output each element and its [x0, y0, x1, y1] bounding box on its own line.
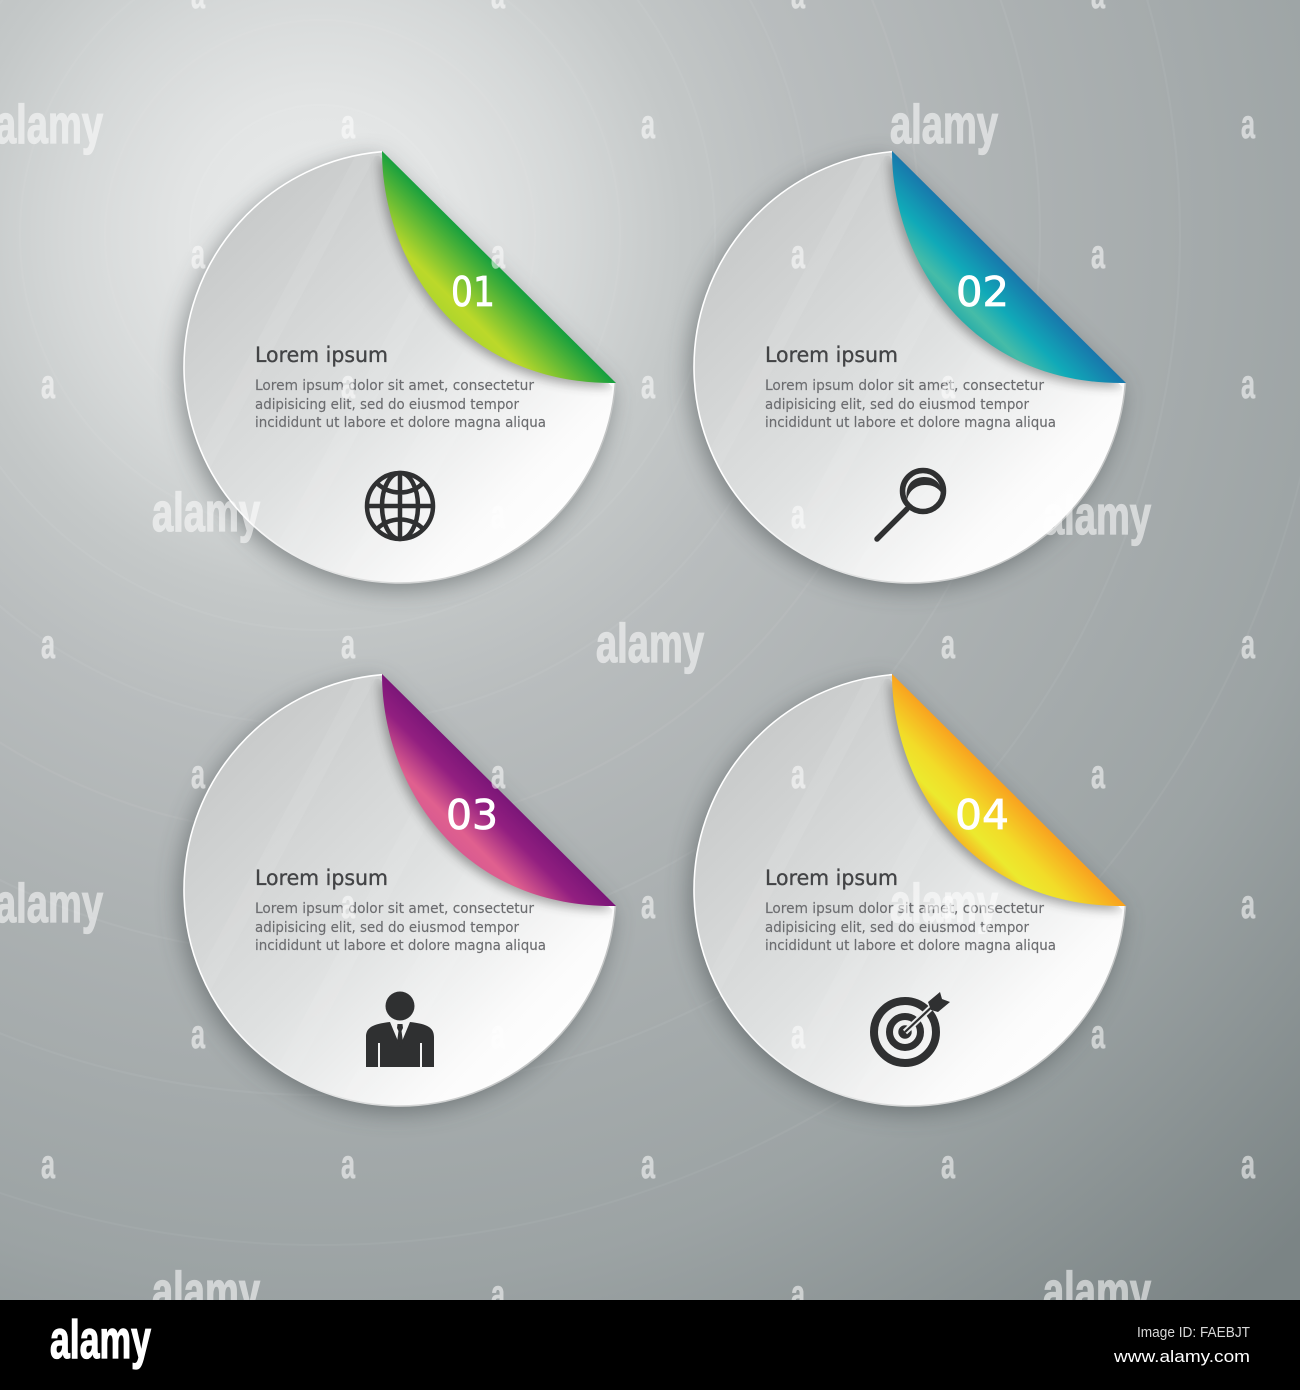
- watermarks: a: [1241, 101, 1256, 147]
- heading: Lorem ipsum: [765, 866, 898, 890]
- footer bar: [0, 1300, 1300, 1390]
- icon: magnifier: [877, 470, 944, 539]
- watermarks: a: [341, 101, 356, 147]
- watermarks: a: [791, 491, 806, 537]
- watermarks: a: [341, 881, 356, 927]
- heading: Lorem ipsum: [255, 343, 388, 367]
- watermarks: a: [941, 621, 956, 667]
- watermarks: a: [641, 1141, 656, 1187]
- watermarks: alamy: [1043, 484, 1151, 546]
- watermarks: a: [791, 1271, 806, 1317]
- watermarks: a: [41, 361, 56, 407]
- watermarks: a: [191, 751, 206, 797]
- watermarks: a: [1241, 1141, 1256, 1187]
- watermarks: a: [941, 881, 956, 927]
- icon: businessman: [366, 992, 434, 1067]
- text block: [255, 901, 546, 954]
- panel: step 01: [180, 147, 616, 597]
- watermarks: a: [341, 621, 356, 667]
- text block: [255, 378, 546, 431]
- panel: step 04: [690, 670, 1126, 1120]
- watermarks: a: [491, 751, 506, 797]
- icon: target with arrow: [874, 992, 950, 1063]
- watermarks: alamy: [152, 1260, 260, 1322]
- text block: adipisicing elit, sed do eiusmod tempor: [765, 397, 1029, 413]
- watermarks: a: [341, 1141, 356, 1187]
- text block: [765, 901, 1056, 954]
- watermarks: alamy: [596, 612, 704, 674]
- watermarks: a: [1241, 881, 1256, 927]
- text block: incididunt ut labore et dolore magna aliqua: [765, 415, 1056, 431]
- curl: green: [382, 151, 616, 383]
- footer logo: alamy: [50, 1310, 151, 1370]
- watermarks: a: [491, 1011, 506, 1057]
- text block: Lorem ipsum dolor sit amet, consectetur: [765, 901, 1044, 917]
- number 04: 04: [955, 791, 1009, 839]
- text block: incididunt ut labore et dolore magna aliqua: [255, 415, 546, 431]
- curl: blue: [892, 151, 1126, 383]
- watermarks: alamy: [890, 93, 998, 155]
- icon: globe: [367, 473, 433, 539]
- heading: Lorem ipsum: [255, 866, 388, 890]
- text block: adipisicing elit, sed do eiusmod tempor: [255, 397, 519, 413]
- watermarks: alamy: [1043, 1260, 1151, 1322]
- text block: Lorem ipsum dolor sit amet, consectetur: [765, 378, 1044, 394]
- watermarks: a: [41, 1141, 56, 1187]
- watermarks: alamy: [152, 481, 260, 543]
- watermarks: a: [1241, 361, 1256, 407]
- text block: incididunt ut labore et dolore magna aliqua: [765, 938, 1056, 954]
- watermarks: a: [341, 361, 356, 407]
- text block: adipisicing elit, sed do eiusmod tempor: [255, 920, 519, 936]
- watermarks: a: [191, 1011, 206, 1057]
- watermarks: a: [641, 361, 656, 407]
- watermarks: a: [641, 101, 656, 147]
- watermarks: a: [791, 1011, 806, 1057]
- number 03: 03: [446, 791, 498, 839]
- watermarks: a: [791, 231, 806, 277]
- text block: Lorem ipsum dolor sit amet, consectetur: [255, 378, 534, 394]
- number 01: 01: [451, 268, 495, 316]
- watermarks: a: [641, 881, 656, 927]
- watermarks: a: [491, 491, 506, 537]
- number 02: 02: [956, 268, 1009, 316]
- text block: incididunt ut labore et dolore magna aliqua: [255, 938, 546, 954]
- watermarks: a: [941, 1141, 956, 1187]
- text block: [765, 378, 1056, 431]
- watermarks: a: [791, 751, 806, 797]
- watermarks: alamy: [890, 872, 998, 934]
- watermarks: a: [491, 1271, 506, 1317]
- text block: Lorem ipsum dolor sit amet, consectetur: [255, 901, 534, 917]
- heading: Lorem ipsum: [765, 343, 898, 367]
- curl: yellow: [892, 674, 1126, 906]
- watermarks: a: [491, 231, 506, 277]
- watermarks: a: [41, 621, 56, 667]
- image id: Image ID: FAEBJT: [1137, 1324, 1250, 1341]
- watermarks: a: [191, 231, 206, 277]
- watermarks: a: [1091, 1011, 1106, 1057]
- watermarks: a: [1241, 621, 1256, 667]
- watermarks: a: [1091, 231, 1106, 277]
- website: www.alamy.com: [1113, 1347, 1250, 1366]
- curl: magenta: [382, 674, 616, 906]
- panel: step 02: [690, 147, 1126, 597]
- text block: adipisicing elit, sed do eiusmod tempor: [765, 920, 1029, 936]
- watermarks: a: [1091, 751, 1106, 797]
- watermarks: a: [941, 361, 956, 407]
- panel: step 03: [180, 670, 616, 1120]
